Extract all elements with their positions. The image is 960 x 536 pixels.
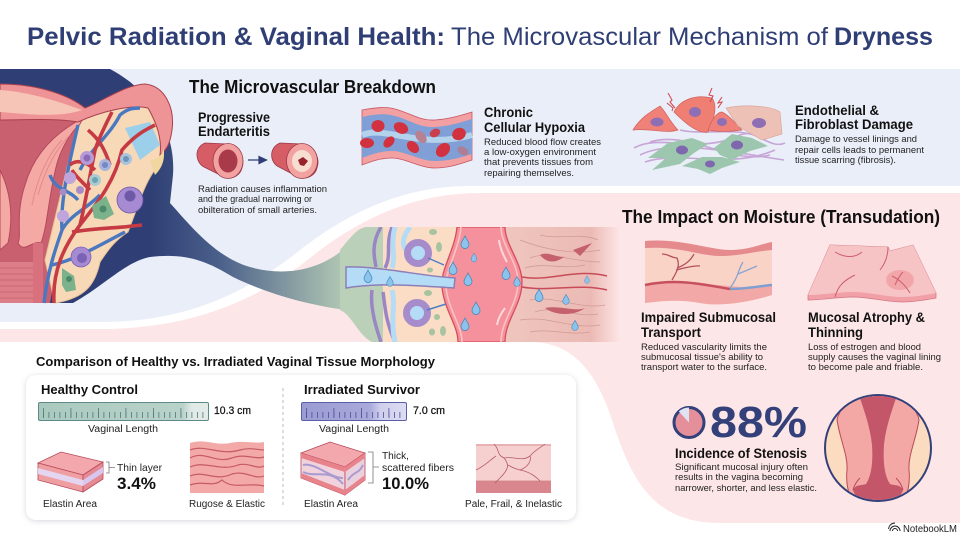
folded wall [18,118,83,247]
heading [484,105,585,135]
text: submucosal tissue's ability to [641,352,763,363]
arrow [248,156,266,164]
healthy control column [38,382,265,510]
icon: healthy artery [197,143,243,178]
heading: Irradiated Survivor [304,382,420,397]
lower vaginal column [0,262,33,303]
title [27,23,933,51]
text: Reduced vascularity limits the [641,342,767,353]
text: Loss of estrogen and blood [808,342,921,353]
label: Rugose & Elastic [189,499,265,510]
red vessels [522,273,607,290]
value: 7.0 cm [413,405,445,417]
text [484,137,601,179]
blue panel background [0,69,960,322]
cells [80,151,94,165]
icon: thick elastin block [301,442,365,495]
text [198,184,327,216]
texture: rugose [190,441,264,493]
callout: Thin layer [117,462,162,474]
heading: Healthy Control [41,382,138,397]
number: 3.4% [117,474,156,493]
text: Damage to vessel linings and [795,134,917,145]
text [641,342,767,373]
statistic: stenosis [674,398,817,494]
heading: the impact on moisture: The Impact on Moisture (Transudation) [622,207,940,227]
text: tissue scarring (fibrosis). [795,155,896,166]
label: Vaginal Length [319,424,389,435]
text: to become pale and friable. [808,362,923,373]
illustration: tissue transudation cross-section [340,227,625,342]
icon: thin elastin block [38,452,103,492]
illustration: vaginal stenosis circle [825,392,931,503]
heading: comparison: Comparison of Healthy vs. Irradiated Vaginal Tissue Morphology [36,354,436,369]
cavity and cervix [0,118,80,303]
text: supply causes the vaginal lining [808,352,941,363]
illustration: thinned mucosal sheet [808,245,936,302]
text: Significant mucosal injury often [675,462,808,473]
heading: Mucosal Atrophy & [808,310,925,325]
heading: Transport [641,325,701,340]
label: Pale, Frail, & Inelastic [465,499,562,510]
heading: Fibroblast Damage [795,117,913,132]
text: obilteration of small arteries. [198,205,317,216]
comparison card [26,375,576,521]
illustration: submucosal layers [645,241,772,304]
heading: Progressive [198,110,270,125]
peach stroma [383,227,463,342]
heading [198,110,270,139]
glands [408,242,428,264]
pink panel background [0,193,960,523]
heading [808,310,925,340]
label: Elastin Area [304,499,358,510]
heading: Incidence of Stenosis [675,445,807,461]
illustration: damaged cells [633,88,785,174]
purple vessels [372,227,395,342]
value: 10.3 cm [214,405,251,417]
heading [795,103,913,132]
icon: pie chart [674,408,704,438]
callout: Thick, [382,450,409,462]
heading: Chronic [484,105,533,120]
text: Radiation causes inflammation [198,184,327,195]
text: and the gradual narrowing or [198,194,313,205]
block: mucosal atrophy and thinning [808,245,941,373]
number: 10.0% [382,474,429,493]
callout: scattered fibers [382,462,454,474]
text [795,134,924,166]
heading: Endarteritis [198,124,270,139]
title: Pelvic Radiation & Vaginal Health: [27,23,445,51]
block: impaired submucosal transport [641,241,776,373]
text: that prevents tissues from [484,157,593,168]
heading [641,310,776,340]
block: chronic cellular hypoxia [360,105,601,179]
text: transport water to the surface. [641,362,767,373]
text: Reduced blood flow creates [484,137,601,148]
illustration: uterus cross-section [0,84,173,303]
pink mucosa [442,227,522,342]
title: Dryness [834,23,933,51]
ruler: 10.3 cm [38,402,208,420]
blue vessels [44,108,140,303]
navy backdrop and connecting strand [0,69,345,310]
bracket [106,462,115,473]
texture: cracked [476,444,551,493]
tan fibrous stroma [505,227,625,342]
text: results in the vagina becoming [675,472,803,483]
heading: Thinning [808,325,863,340]
text: narrower, shorter, and less elastic. [675,483,817,494]
label: Elastin Area [43,499,97,510]
blue duct [346,267,455,288]
heading: Endothelial & [795,103,879,118]
heading: the microvascular breakdown: The Microvascular Breakdown [189,77,436,97]
label: Vaginal Length [88,424,158,435]
title: The Microvascular Mechanism of [451,23,828,51]
block: progressive endarteritis [197,110,327,216]
text: repairing themselves. [484,168,574,179]
text: a low-oxygen environment [484,147,596,158]
fundus and tube [0,84,173,155]
text [675,462,817,494]
heading: Impaired Submucosal [641,310,776,325]
green stroma [340,227,385,342]
callout [382,450,454,474]
text [808,342,941,373]
irradiated survivor column [301,382,562,510]
ruler: 7.0 cm [302,402,406,420]
illustration: blood vessel [360,107,472,168]
bracket [368,452,379,483]
text: repair cells leads to permanent [795,145,924,156]
green specks [429,229,437,235]
icon: narrowed artery [272,143,318,178]
fimbriae [125,122,160,160]
number: 88% [710,398,807,447]
peach tissue [45,107,163,303]
heading: Cellular Hypoxia [484,120,585,135]
droplets [461,236,469,248]
block: endothelial and fibroblast damage [633,88,924,174]
red vessels [54,112,155,303]
